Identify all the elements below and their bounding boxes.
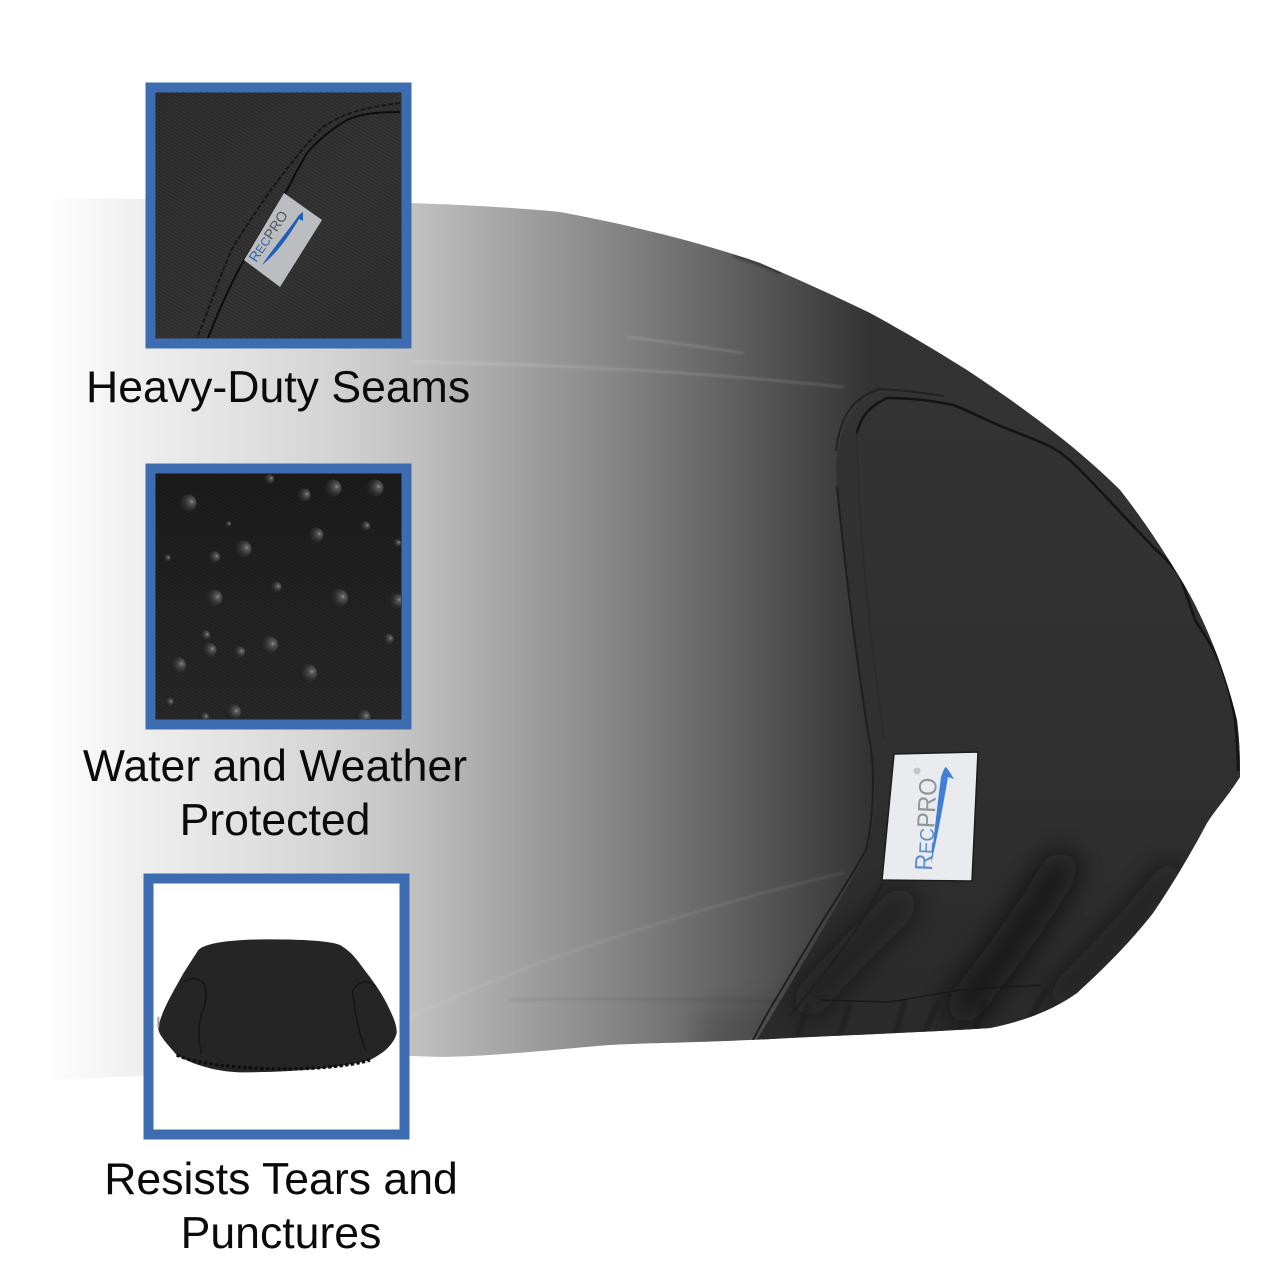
caption: water and weather protected: Protected: [180, 796, 370, 845]
caption: heavy-duty seams: Heavy-Duty Seams: [86, 363, 470, 412]
brand tag on seam: [244, 193, 322, 287]
feature panel: water and weather protected: [150, 468, 406, 724]
water droplets: [155, 473, 404, 724]
product photo frame: [148, 878, 404, 1134]
brand tag on seat cover: [882, 752, 978, 881]
dark folds in lower patch: [810, 870, 1170, 1005]
caption: resists tears and punctures: Resists Tears and: [104, 1155, 458, 1204]
brand tag on seam: RECPRO: [245, 208, 291, 265]
darker fabric shading near lower seam: [698, 1010, 770, 1042]
caption: resists tears and punctures: Punctures: [181, 1209, 381, 1258]
elastic gathers along bottom edge: [798, 990, 1046, 1036]
water photo frame: [150, 468, 406, 724]
patch seams: [753, 389, 1238, 1040]
fabric fold lines in faded area: [484, 254, 844, 1001]
caption: water and weather protected: Water and Weather: [83, 742, 467, 791]
feature panel: resists tears and punctures: [148, 878, 404, 1134]
main product image: seat cover fading to white on the left: [30, 190, 1260, 1090]
seat side patch: [757, 424, 1240, 1040]
feature panel: heavy-duty seams: [150, 88, 406, 344]
small seat cover photo: [157, 939, 397, 1072]
seam photo frame: [150, 88, 406, 344]
brand tag on seat cover: RECPRO: [910, 777, 943, 871]
seam photo: [155, 92, 401, 338]
caption: water and weather protected: [83, 742, 467, 845]
caption: resists tears and punctures: [104, 1155, 458, 1258]
